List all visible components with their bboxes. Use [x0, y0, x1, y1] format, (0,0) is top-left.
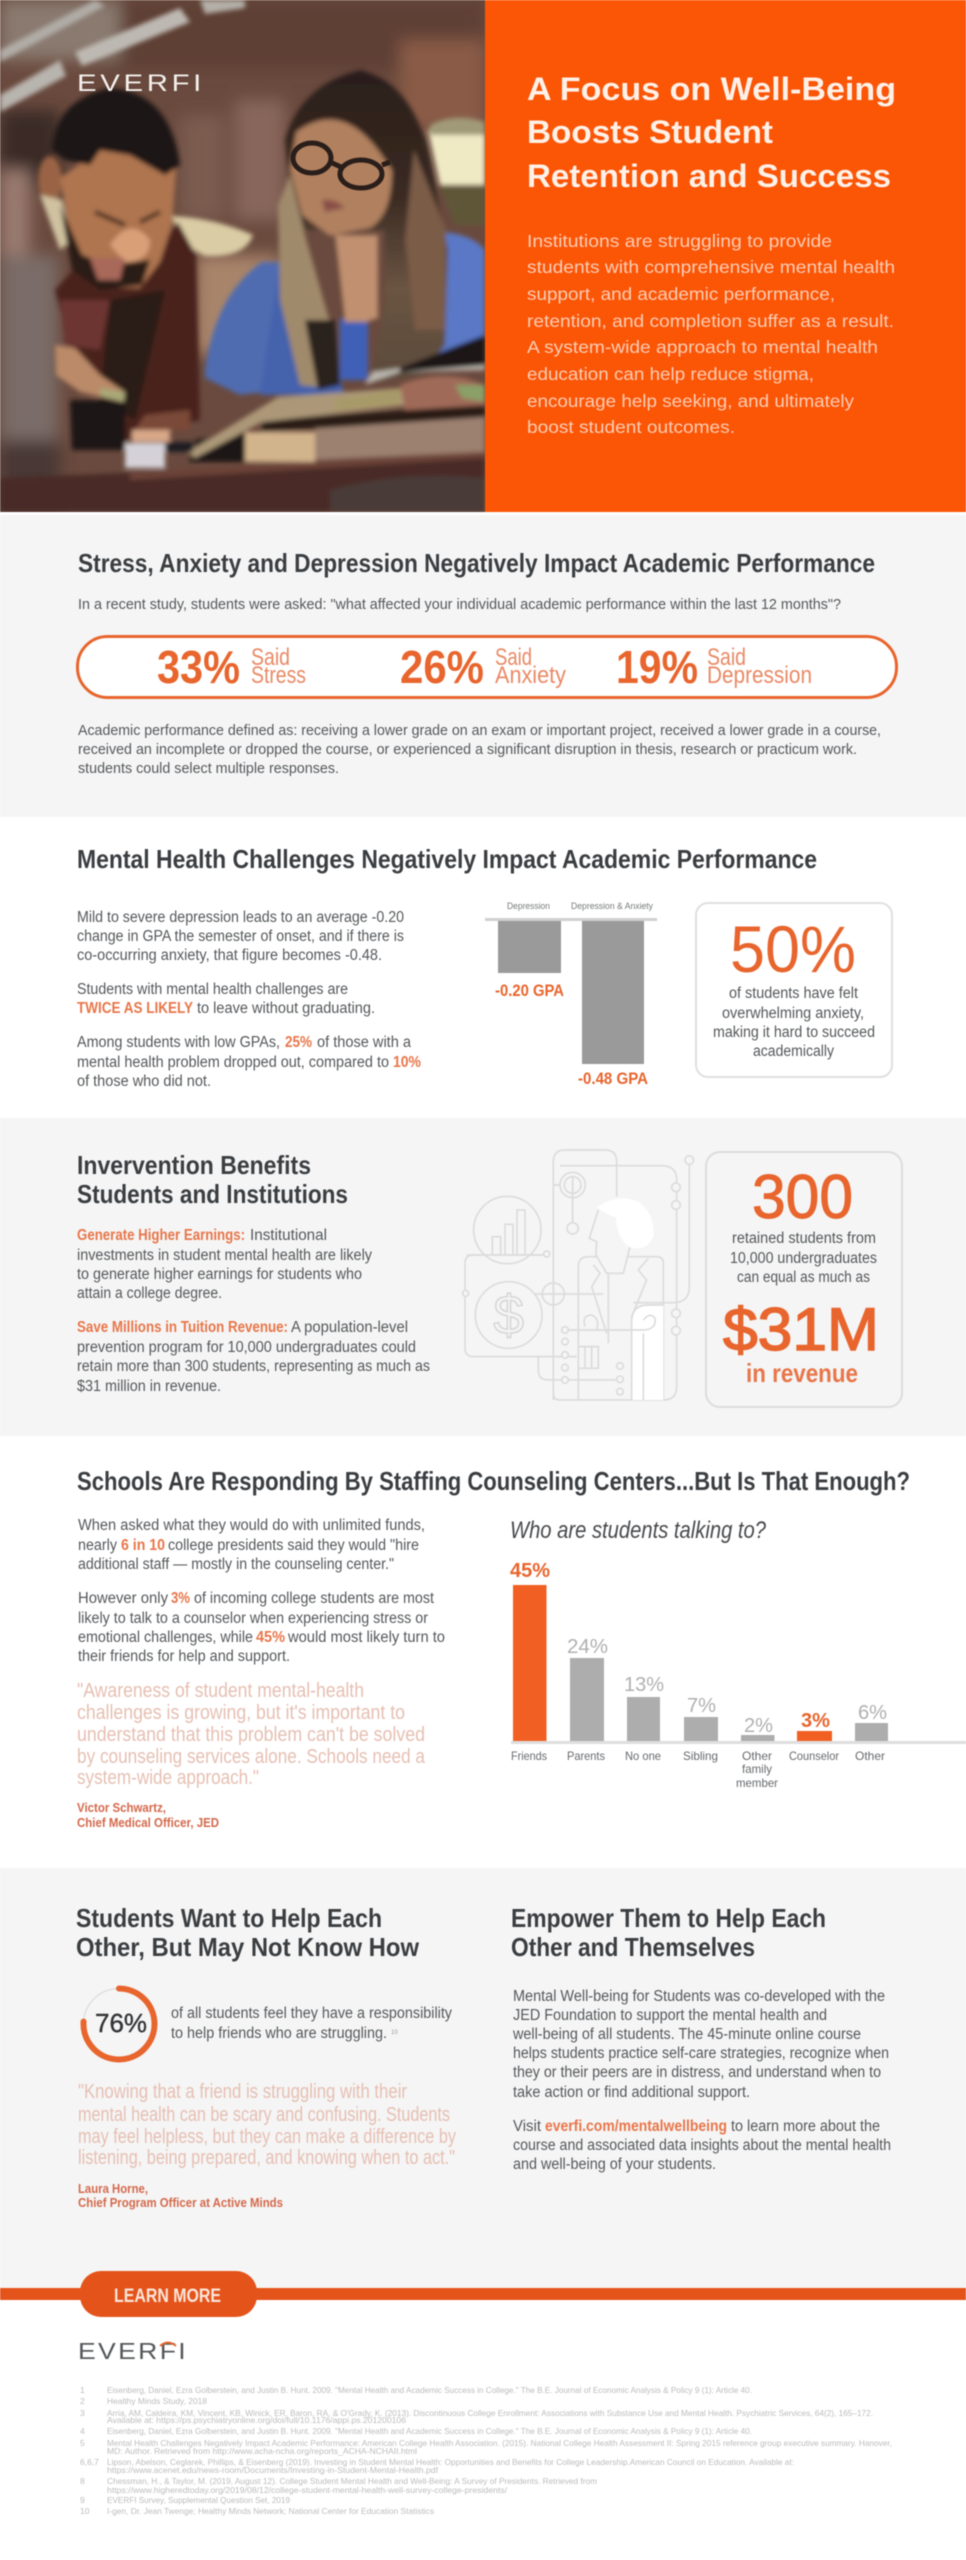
callout: 50%: overwhelming anxiety, [722, 1005, 864, 1022]
stat: 26% anxiety: Said [495, 644, 532, 671]
quote: Laura Horne [78, 2081, 456, 2210]
hero intro text: retention, and completion suffer as a result. [527, 311, 894, 331]
heading: Stress, Anxiety and Depression Negatively Impact Academic Performance [78, 548, 875, 578]
chart: who are students talking to: Other [855, 1749, 885, 1763]
counselor text: emotional challenges, while [78, 1629, 253, 1646]
course description: Mental Well-being for Students was co-developed with the [513, 1988, 885, 2005]
woman: blouse [205, 262, 280, 395]
GPA bar chart [485, 901, 657, 1088]
hero intro text: education can help reduce stigma, [527, 364, 814, 384]
counselor text: would most likely turn to [287, 1629, 445, 1646]
references: Mental Health Challenges Negatively Impact Academic Performance: American College Health Association. (2015). National College Health Assessment II: Spring 2015 reference group executive summary. Hanover, [107, 2438, 892, 2448]
twice as likely text: to leave without graduating. [197, 1000, 375, 1017]
GPA text: change in GPA the semester of onset, and if there is [77, 928, 404, 945]
quote: Laura Horne: listening, being prepared, and knowing when to act." [78, 2147, 455, 2169]
chart: who are students talking to: Counselor [789, 1749, 839, 1763]
stat: 19% depression: 19% [616, 641, 698, 693]
counselor text: 45% [256, 1629, 285, 1646]
course description: JED Foundation to support the mental health and [513, 2007, 827, 2024]
visit link text: to learn more about the [731, 2118, 880, 2135]
hero title: Retention and Success [527, 158, 891, 194]
higher earnings text: Institutional [250, 1227, 327, 1244]
presidents text: When asked what they would do with unlimited funds, [78, 1517, 425, 1534]
counselor text: their friends for help and support. [78, 1648, 290, 1665]
logo: EVERFI footer: EVERFI [78, 2338, 188, 2364]
illustration: person with line-art icons [463, 1150, 694, 1400]
references: EVERFI Survey, Supplemental Question Set, 2019 [107, 2495, 290, 2505]
dropout text: Among students with low GPAs, [77, 1034, 280, 1051]
man: shirt [55, 222, 200, 440]
GPA text: co-occurring anxiety, that figure becomes -0.48. [77, 947, 382, 964]
responsibility text: to help friends who are struggling. [171, 2025, 387, 2042]
GPA bar chart: Depression [507, 901, 550, 911]
icon: dollar sign: $ [493, 1284, 524, 1346]
hero intro text: encourage help seeking, and ultimately [527, 391, 854, 411]
chart: who are students talking to: 2% [744, 1715, 773, 1737]
higher earnings text: Generate Higher Earnings: [77, 1227, 245, 1244]
GPA bar chart: -0.20 GPA [495, 981, 564, 1000]
responsibility text [171, 2005, 452, 2042]
quote: Victor Schwartz: by counseling services alone. Schools need a [77, 1746, 426, 1768]
references: I-gen, Dr. Jean Twenge; Healthy Minds Network; National Center for Education Statistics [107, 2506, 434, 2516]
quote: Laura Horne: Chief Program Officer at Active Minds [78, 2195, 283, 2210]
references: Healthy Minds Study, 2018 [107, 2396, 207, 2406]
glasses [293, 143, 390, 188]
references: Eisenberg, Daniel, Ezra Golberstein, and Justin B. Hunt. 2009. "Mental Health and Academic Success in College." The B.E. Journal of Economic Analysis & Policy 9 (1): Article 40. [107, 2385, 752, 2395]
course description [512, 1988, 889, 2101]
chart: who are students talking to: family [742, 1762, 772, 1776]
chart: who are students talking to [510, 1517, 966, 1790]
chart: who are students talking to: 24% [567, 1636, 608, 1658]
references: 5 [80, 2438, 85, 2448]
presidents text: nearly [78, 1537, 117, 1554]
tuition revenue text: prevention program for 10,000 undergraduates could [77, 1339, 416, 1356]
callout: 300 students and $31M: 300 [752, 1163, 853, 1232]
callout: 50%: making it hard to succeed [713, 1024, 875, 1041]
visit link text: Visit [513, 2118, 542, 2135]
hero intro text: support, and academic performance, [527, 284, 835, 304]
stat: 33% stress: Stress [251, 662, 306, 689]
quote: Victor Schwartz: challenges is growing, but it's important to [77, 1702, 405, 1724]
woman: face [290, 120, 392, 236]
GPA bar chart: Depression & Anxiety [571, 901, 653, 911]
stat pill [78, 636, 896, 698]
orange panel [485, 0, 966, 512]
callout: 300 students and $31M: can equal as much as [737, 1269, 870, 1286]
stat: 33% stress [157, 641, 306, 693]
callout: 50%: academically [753, 1043, 834, 1060]
chart: who are students talking to: 3% [801, 1710, 830, 1732]
references: Available at: https://ps.psychiatryonline.org/doi/full/10.1176/appi.ps.201200106 [107, 2415, 406, 2425]
chart: who are students talking to: Friends [511, 1749, 547, 1763]
references: Eisenberg, Daniel, Ezra Golberstein, and Justin B. Hunt. 2009. "Mental Health and Academic Success in College." The B.E. Journal of Economic Analysis & Policy 9 (1): Article 40. [107, 2426, 752, 2436]
button: learn more [80, 2271, 257, 2317]
callout: 300 students and $31M: in revenue [746, 1358, 858, 1388]
references: 1 [80, 2385, 85, 2395]
dropout text: 10% [393, 1054, 421, 1071]
presidents text: 6 in 10 [121, 1537, 165, 1554]
heading: empower them: Empower Them to Help Each [511, 1903, 826, 1933]
higher earnings text: attain a college degree. [77, 1285, 222, 1302]
quote: Victor Schwartz: Chief Medical Officer, JED [77, 1815, 219, 1830]
GPA text: Mild to severe depression leads to an average -0.20 [77, 909, 404, 926]
GPA text [77, 909, 404, 964]
course description: take action or find additional support. [513, 2084, 750, 2101]
stat: 19% depression: Depression [707, 662, 812, 689]
panel: schools staffing counseling centers [0, 1436, 966, 1868]
man: hair [52, 88, 180, 175]
dropout text: 25% [285, 1034, 312, 1051]
course description: well-being of all students. The 45-minute online course [512, 2026, 861, 2043]
references: https://www.acenet.edu/news-room/Documents/Investing-in-Student-Mental-Health.pdf [107, 2465, 439, 2475]
references: 4 [80, 2426, 85, 2436]
hero intro text: Institutions are struggling to provide [527, 231, 832, 251]
tuition revenue text: Save Millions in Tuition Revenue: [77, 1319, 288, 1336]
chart: who are students talking to: 45% [510, 1560, 550, 1582]
callout: 300 students and $31M: 10,000 undergraduates [730, 1250, 877, 1267]
panel: hero [0, 0, 966, 512]
chart: who are students talking to: member [736, 1776, 778, 1790]
study question: In a recent study, students were asked: "what affected your individual academic performance within the last 12 months"? [78, 597, 841, 613]
hero intro text [527, 231, 895, 437]
heading: Invervention Benefits [77, 1150, 311, 1180]
chart: who are students talking to: 6% [858, 1702, 887, 1724]
counselor text: However only [78, 1590, 168, 1607]
higher earnings text: investments in student mental health are likely [77, 1247, 372, 1264]
window streaks [0, 0, 105, 62]
stat: 33% stress: 33% [157, 641, 240, 693]
counselor text: likely to talk to a counselor when experiencing stress or [78, 1610, 428, 1627]
visit link text: and well-being of your students. [513, 2156, 716, 2173]
callout: 50%: 50% [730, 912, 856, 986]
twice as likely text: Students with mental health challenges are [77, 981, 348, 998]
chart: who are students talking to: Parents [567, 1749, 605, 1763]
woman: neck and chest [335, 235, 378, 322]
quote: Victor Schwartz: "Awareness of student mental-health [77, 1680, 364, 1702]
chart title: Who are students talking to? [510, 1517, 767, 1544]
quote: Victor Schwartz: Victor Schwartz, [77, 1800, 166, 1815]
heading: Mental Health Challenges Negatively Impact Academic Performance [77, 844, 817, 874]
GPA bar chart: -0.48 GPA [578, 1069, 648, 1088]
callout: 50%: of students have felt [729, 985, 859, 1002]
logo: EVERFI white: EVERFI [77, 70, 205, 97]
higher earnings text: to generate higher earnings for students who [77, 1266, 362, 1283]
tuition revenue text [77, 1319, 430, 1395]
responsibility text: of all students feel they have a responsibility [171, 2005, 452, 2022]
visit link text: course and associated data insights about the mental health [513, 2137, 891, 2154]
chart: who are students talking to: No one [625, 1749, 661, 1763]
twice as likely text [77, 981, 375, 1017]
references: 6,6,7 [80, 2457, 99, 2467]
references: 2 [80, 2396, 85, 2406]
dropout text [77, 1034, 421, 1090]
twice as likely text: TWICE AS LIKELY [77, 1000, 194, 1017]
tuition revenue text: A population-level [291, 1319, 408, 1336]
presidents text [78, 1517, 425, 1573]
hero intro text: A system-wide approach to mental health [527, 337, 878, 357]
stat: 26% anxiety [400, 641, 566, 693]
panel: mental health challenges [0, 817, 966, 1118]
heading: students want to help [76, 1903, 420, 1962]
counselor text [78, 1590, 445, 1665]
stat: 26% anxiety: 26% [400, 641, 484, 693]
responsibility text: 10 [391, 2030, 398, 2036]
references: MD: Author. Retrieved from http://www.acha-ncha.org/reports_ACHA-NCHAII.html [107, 2446, 417, 2456]
button: learn more: LEARN MORE [114, 2286, 221, 2307]
man: beard and mouth [60, 205, 150, 290]
heading: empower them [511, 1903, 826, 1962]
quote: Laura Horne: may feel helpless, but they can make a difference by [78, 2126, 456, 2148]
presidents text: college presidents said they would "hire [168, 1537, 419, 1554]
references: Chessman, H., & Taylor, M. (2019, August 12). College Student Mental Health and Well-Being: A Survey of Presidents. Retrieved from [107, 2476, 597, 2486]
dropout text: of those who did not. [77, 1073, 211, 1090]
table and books [0, 452, 485, 512]
quote: Laura Horne: "Knowing that a friend is struggling with their [78, 2081, 407, 2103]
definition note: received an incomplete or dropped the course, or experienced a significant disruption in thesis, research or practicum work. [78, 742, 857, 758]
quote: Laura Horne: Laura Horne, [78, 2181, 148, 2196]
stat: 19% depression [616, 641, 812, 693]
visit link text: everfi.com/mentalwellbeing [545, 2118, 727, 2135]
references: 8 [80, 2476, 85, 2486]
references: https://www.higheredtoday.org/2019/08/12/college-student-mental-health-well-survey-college-presidents/ [107, 2485, 508, 2495]
heading: Students and Institutions [77, 1179, 348, 1209]
references: 10 [80, 2506, 90, 2516]
counselor text: of incoming college students are most [194, 1590, 435, 1607]
panel: students want to help [0, 1868, 966, 2290]
man: hand [55, 345, 125, 402]
tuition revenue text: $31 million in revenue. [77, 1378, 221, 1395]
references: Arria, AM, Caldeira, KM, Vincent, KB, Winick, ER, Baron, RA, & O'Grady, K. (2013). Discontinuous College Enrollment: Associations with Substance Use and Mental Health. Psychiatric Services, 64(2), 165–172. [107, 2408, 873, 2418]
woman: hair [285, 70, 448, 382]
quote: Victor Schwartz: understand that this problem can't be solved [77, 1724, 425, 1746]
chart: who are students talking to: 7% [687, 1695, 716, 1717]
quote: Victor Schwartz [77, 1680, 426, 1830]
stat: 26% anxiety: Anxiety [495, 662, 566, 689]
definition note: students could select multiple responses. [78, 761, 339, 777]
callout: 300 students and $31M [706, 1152, 902, 1407]
tuition revenue text: retain more than 300 students, representing as much as [77, 1358, 430, 1375]
callout: 300 students and $31M: retained students from [732, 1230, 876, 1247]
references: Lipson, Abelson, Ceglarek, Phillips, & Eisenberg (2019). Investing in Student Mental Health: Opportunities and Benefits for College Leadership.American Council on Education. Available at: [107, 2457, 794, 2467]
donut: 76% [84, 1988, 154, 2060]
callout: 300 students and $31M: $31M [723, 1296, 879, 1363]
higher earnings text [77, 1227, 372, 1302]
course description: helps students practice self-care strategies, recognize when [513, 2045, 889, 2062]
panel: stress, anxiety, depression [0, 515, 966, 817]
lamps [428, 130, 485, 185]
stat: 33% stress: Said [251, 644, 290, 671]
hero intro text: students with comprehensive mental health [527, 257, 895, 277]
dropout text: mental health problem dropped out, compared to [77, 1054, 389, 1071]
man: ear and face [38, 156, 62, 204]
stat: 19% depression: Said [707, 644, 746, 671]
hero intro text: boost student outcomes. [527, 417, 735, 437]
donut: 76%: 76% [95, 2008, 147, 2038]
heading [77, 1150, 348, 1209]
chart: who are students talking to: Sibling [683, 1749, 718, 1763]
presidents text: additional staff — mostly in the counseling center." [78, 1556, 394, 1573]
counselor text: 3% [171, 1590, 190, 1607]
course description: they or their peers are in distress, and understand when to [513, 2064, 881, 2081]
hero photo: two students studying [0, 0, 485, 512]
chart: who are students talking to: 13% [624, 1674, 664, 1696]
hero title: A Focus on Well-Being [527, 71, 896, 107]
definition note: Academic performance defined as: receiving a lower grade on an exam or important project, received a lower grade in a course, [78, 723, 881, 739]
hero title: Boosts Student [527, 114, 773, 150]
definition note [78, 723, 881, 777]
chart: who are students talking to: Other [742, 1749, 772, 1763]
references: 9 [80, 2495, 85, 2505]
orange band [0, 2288, 966, 2300]
references: 3 [80, 2408, 85, 2418]
heading: students want to help: Other, But May Not Know How [76, 1932, 420, 1962]
panel: intervention benefits [0, 1118, 966, 1436]
callout: 50% [696, 903, 892, 1077]
quote: Victor Schwartz: system-wide approach." [77, 1767, 259, 1789]
dropout text: of those with a [317, 1034, 411, 1051]
visit link text [513, 2118, 891, 2173]
references [80, 2385, 892, 2516]
hero title [527, 71, 896, 194]
heading: empower them: Other and Themselves [511, 1932, 755, 1962]
heading: students want to help: Students Want to Help Each [76, 1903, 382, 1933]
quote: Laura Horne: mental health can be scary and confusing. Students [78, 2104, 450, 2126]
